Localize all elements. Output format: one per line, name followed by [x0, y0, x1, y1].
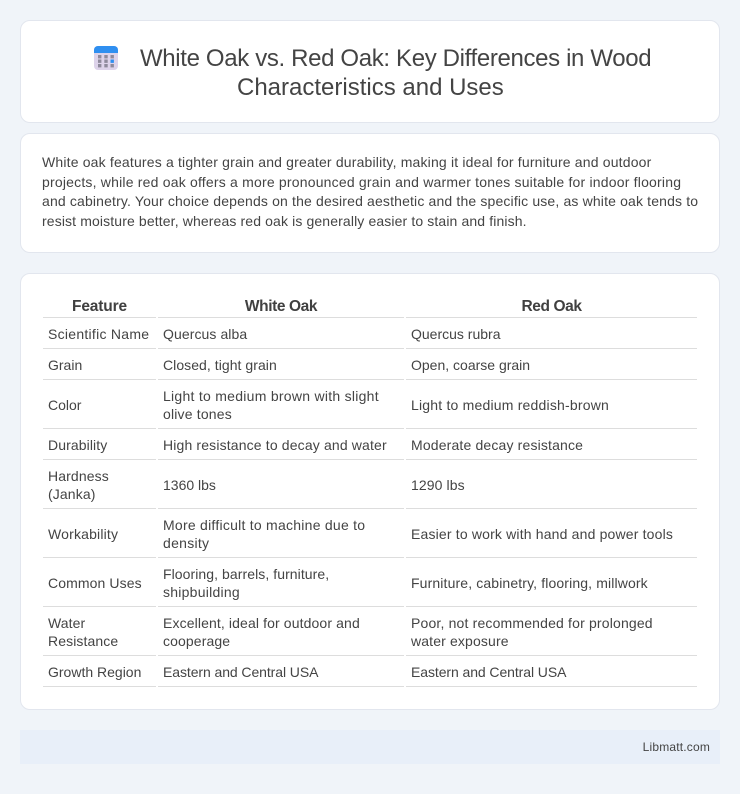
intro text: resist moisture better, whereas red oak is generally easier to stain and finish.	[42, 213, 527, 229]
row: workability: Workability	[48, 526, 118, 542]
row: growth region: Eastern and Central USA	[411, 664, 566, 680]
row: grain: Open, coarse grain	[411, 357, 530, 373]
table card	[20, 273, 720, 710]
row: durability	[48, 437, 583, 453]
row: color	[48, 388, 609, 422]
row: common uses: Flooring, barrels, furniture,	[163, 566, 329, 582]
row: water resistance: water exposure	[411, 633, 509, 649]
footer bar	[20, 730, 720, 764]
row: grain	[48, 357, 530, 373]
row: grain: Grain	[48, 357, 82, 373]
row: durability: High resistance to decay and water	[163, 437, 387, 453]
row: workability: density	[163, 535, 209, 551]
row: color: Color	[48, 397, 81, 413]
row: durability: Moderate decay resistance	[411, 437, 583, 453]
row: water resistance: cooperage	[163, 633, 230, 649]
intro text: and cabinetry. Your choice depends on the desired aesthetic and the specific use, as white oak tends to	[42, 193, 698, 209]
row: water resistance	[48, 615, 653, 649]
row: grain: Closed, tight grain	[163, 357, 277, 373]
icon: calendar	[94, 46, 118, 70]
row: scientific name	[48, 326, 501, 342]
row: durability: Durability	[48, 437, 107, 453]
row: hardness: Hardness	[48, 468, 109, 484]
row: workability: More difficult to machine due to	[163, 517, 365, 533]
row: workability	[48, 517, 673, 551]
footer text: Libmatt.com	[643, 740, 710, 754]
table header: Feature	[72, 298, 127, 315]
table header: Red Oak	[521, 298, 582, 315]
row: common uses: Furniture, cabinetry, flooring, millwork	[411, 575, 648, 591]
row: workability: Easier to work with hand and power tools	[411, 526, 673, 542]
intro card	[20, 133, 720, 253]
row: hardness: 1290 lbs	[411, 477, 465, 493]
row: water resistance: Poor, not recommended for prolonged	[411, 615, 653, 631]
row: water resistance: Resistance	[48, 633, 118, 649]
row: water resistance: Water	[48, 615, 85, 631]
row: common uses: shipbuilding	[163, 584, 240, 600]
row: scientific name: Scientific Name	[48, 326, 149, 342]
row: common uses: Common Uses	[48, 575, 142, 591]
intro text	[42, 154, 698, 229]
table header	[72, 298, 582, 315]
header card	[20, 20, 720, 123]
row: scientific name: Quercus alba	[163, 326, 247, 342]
row: hardness: 1360 lbs	[163, 477, 216, 493]
row: growth region	[48, 664, 566, 680]
intro text: projects, while red oak offers a more pronounced grain and warmer tones suitable for indoor flooring	[42, 174, 681, 190]
row: hardness	[48, 468, 465, 502]
row: color: olive tones	[163, 406, 232, 422]
intro text: White oak features a tighter grain and greater durability, making it ideal for furniture and outdoor	[42, 154, 651, 170]
title: Characteristics and Uses	[237, 74, 504, 101]
row: common uses	[48, 566, 648, 600]
row: growth region: Growth Region	[48, 664, 141, 680]
row: water resistance: Excellent, ideal for outdoor and	[163, 615, 360, 631]
row: growth region: Eastern and Central USA	[163, 664, 318, 680]
table header: White Oak	[245, 298, 317, 315]
row: color: Light to medium brown with slight	[163, 388, 379, 404]
row: scientific name: Quercus rubra	[411, 326, 500, 342]
table	[43, 298, 697, 687]
title	[140, 45, 651, 101]
row: hardness: (Janka)	[48, 486, 96, 502]
row: color: Light to medium reddish-brown	[411, 397, 609, 413]
title: White Oak vs. Red Oak: Key Differences in Wood	[140, 45, 651, 72]
